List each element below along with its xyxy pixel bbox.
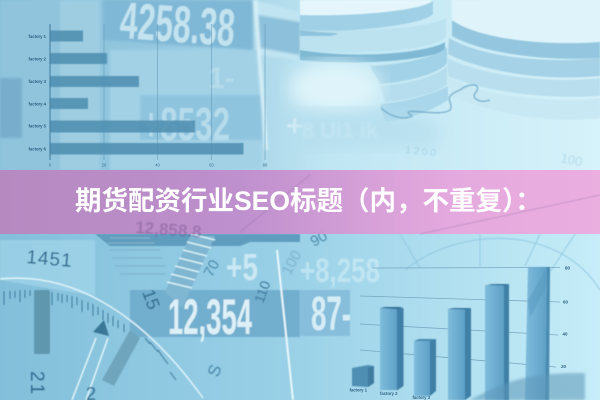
plus sign fragment: + xyxy=(286,110,304,143)
dark panel beside 87 xyxy=(300,290,350,336)
factory labels: factory 1 xyxy=(350,388,368,392)
protractor 100: 100 xyxy=(279,248,305,278)
gauge needle bar xyxy=(34,290,50,354)
factory labels xyxy=(350,388,431,400)
title: 期货配资行业SEO标题（内，不重复）： xyxy=(75,186,542,216)
gauge arc xyxy=(0,278,203,398)
numbers through band: 12,858.8 xyxy=(135,218,202,242)
coin stacks, top right xyxy=(289,0,600,169)
axis value labels: 80 xyxy=(263,162,268,168)
top background xyxy=(0,0,600,236)
axis value labels: 80 xyxy=(565,266,570,270)
column 6 xyxy=(525,267,550,400)
ticker number 8532: +8532 xyxy=(142,98,230,150)
column 1 xyxy=(352,365,374,387)
reading 12,354: 12,354 xyxy=(168,289,252,345)
bottom background xyxy=(0,234,600,400)
reading 15: 15 xyxy=(138,287,164,312)
reading 5: S xyxy=(204,362,226,379)
banknote shade xyxy=(300,110,440,150)
light panel xyxy=(0,240,95,296)
title band xyxy=(0,170,600,234)
soft white cloud of banknote xyxy=(289,62,381,114)
bars xyxy=(50,30,244,154)
rule lines xyxy=(108,238,166,274)
number panel xyxy=(130,290,300,337)
ticker fragments, bottom centre xyxy=(300,227,600,341)
axis value labels xyxy=(49,162,268,168)
horizontal bar chart xyxy=(29,24,268,168)
axis value labels: 60 xyxy=(563,300,568,304)
axis value labels: 40 xyxy=(562,332,568,336)
vertical light line xyxy=(277,250,293,400)
pointer head xyxy=(93,320,109,336)
chart gridlines xyxy=(360,268,560,367)
factory labels xyxy=(29,34,47,152)
column 3 xyxy=(414,339,436,396)
axis value labels: 40 xyxy=(155,162,160,168)
right coin stack xyxy=(447,0,600,120)
scale hatch xyxy=(167,234,215,288)
reading +5: +5 xyxy=(226,247,258,289)
faint number 1200: 1 2 0 0 xyxy=(405,145,437,159)
angled gauge bar xyxy=(102,330,140,386)
protractor arc lines xyxy=(400,234,600,290)
ticker panels, top left xyxy=(0,0,300,170)
dark ticker strip xyxy=(95,234,300,246)
protractor gauge, bottom left xyxy=(0,234,305,400)
texture under band xyxy=(135,175,600,242)
factory labels: factory 3 xyxy=(412,395,431,400)
column 5 xyxy=(485,284,509,400)
column 2 xyxy=(380,307,404,390)
axis value labels: 20 xyxy=(561,364,566,369)
3D column chart xyxy=(350,266,585,400)
scale strip xyxy=(165,236,215,308)
column 4 xyxy=(448,308,471,400)
factory labels: factory 6 xyxy=(29,146,47,152)
reading 87-: 87- xyxy=(311,288,351,341)
reading 21: 21 xyxy=(26,371,47,396)
left coin stack xyxy=(300,0,448,122)
reading 90: 90 xyxy=(308,227,330,250)
protractor 110: 110 xyxy=(251,278,274,305)
protractor lines through band xyxy=(240,175,600,234)
gauge pointer xyxy=(72,338,108,400)
faint number 100: 100 xyxy=(559,150,584,169)
handwritten squiggle xyxy=(381,85,490,118)
factory labels: factory 4 xyxy=(29,102,47,106)
axis value labels: 60 xyxy=(209,162,214,168)
factory labels: factory 5 xyxy=(29,124,47,128)
axis value labels xyxy=(561,266,570,369)
ticker number fragment: 1- xyxy=(208,62,235,95)
chart axis xyxy=(49,24,51,160)
factory labels: factory 2 xyxy=(29,56,47,62)
factory labels: factory 3 xyxy=(29,79,47,84)
axis value labels: 0 xyxy=(49,162,52,168)
chart gridlines xyxy=(104,24,265,160)
factory labels: factory 2 xyxy=(380,391,398,396)
reading 48,258: +8,258 xyxy=(300,252,380,290)
chart floor shadow xyxy=(470,373,585,400)
protractor 70: 70 xyxy=(201,257,223,280)
faint numbers on banknote: 8 Ui1 ik xyxy=(302,118,379,143)
factory labels: factory 1 xyxy=(29,34,47,39)
axis value labels: 20 xyxy=(102,162,107,168)
gauge ticks xyxy=(4,290,176,380)
reading 1451: 1451 xyxy=(26,247,73,272)
